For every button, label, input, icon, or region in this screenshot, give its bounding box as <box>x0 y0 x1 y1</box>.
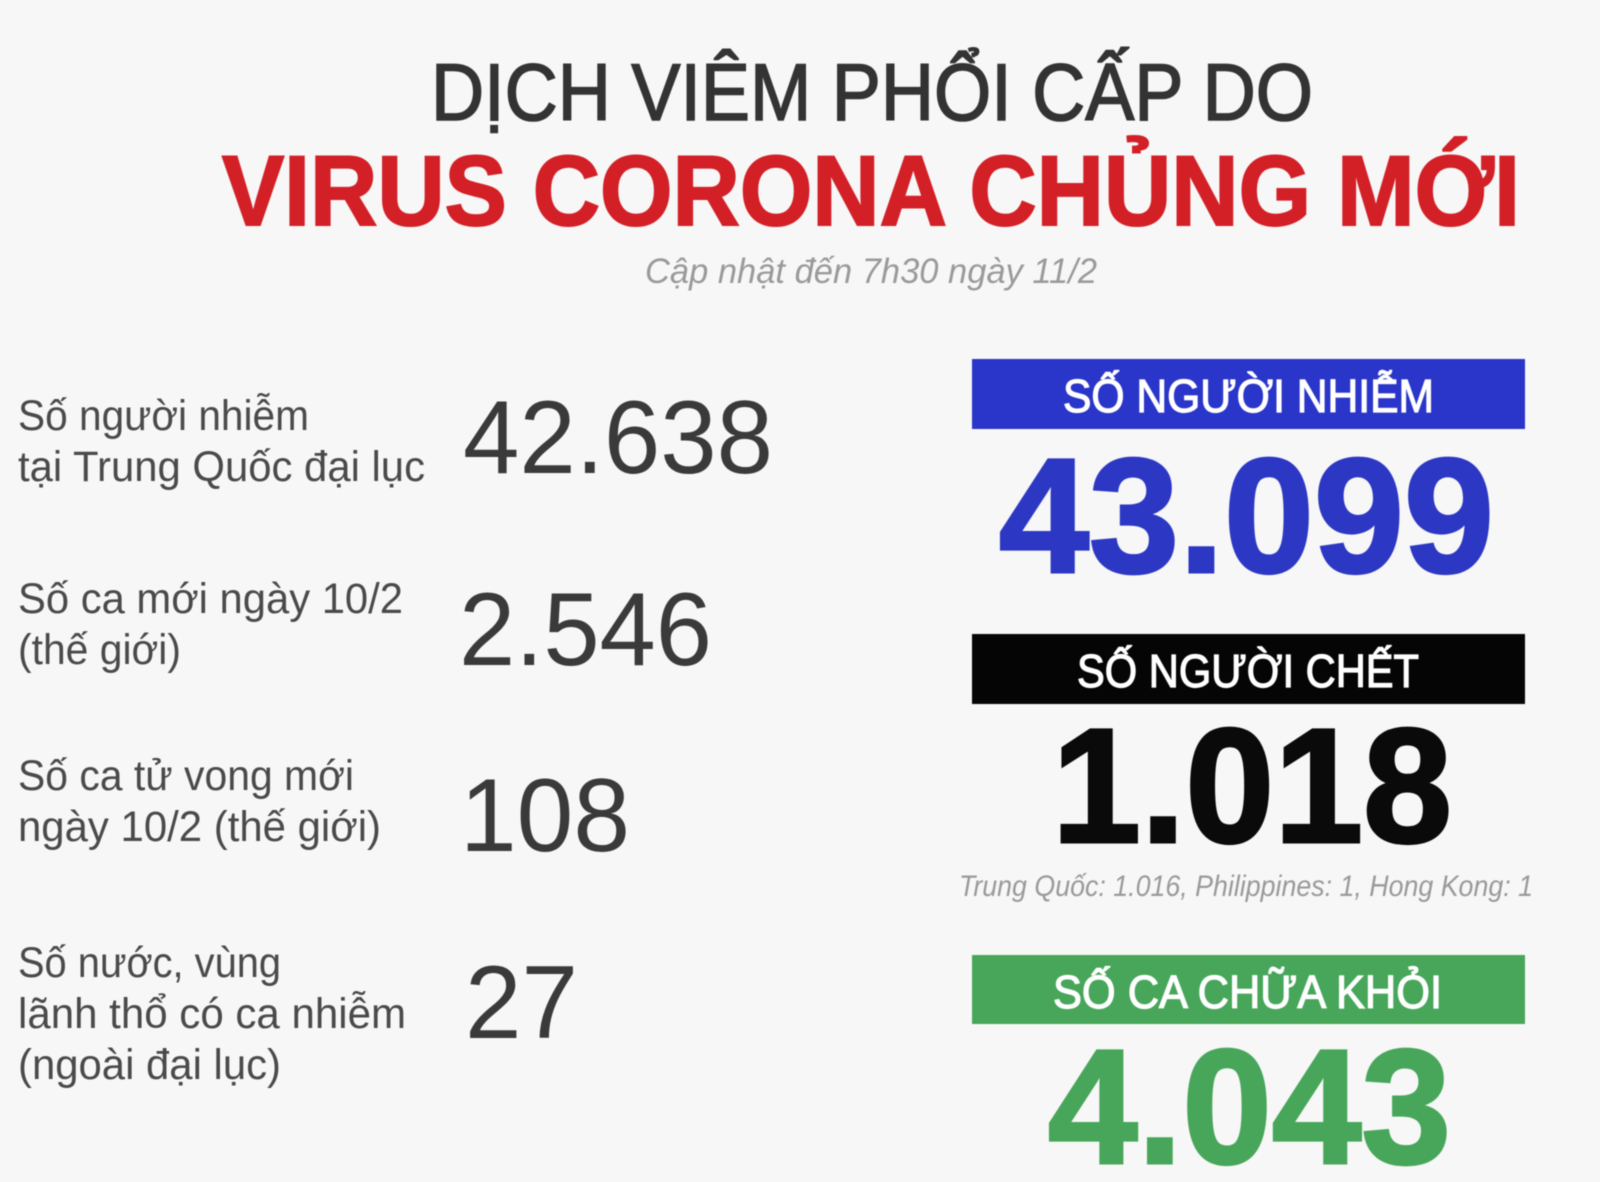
label: Số nước, vùng <box>18 939 281 987</box>
stat: new deaths 10/2 <box>18 752 630 874</box>
label line 3: (ngoài đại lục) <box>18 1041 281 1089</box>
title line 1: DỊCH VIÊM PHỔI CẤP DO <box>431 47 1313 138</box>
label line 2: lãnh thổ có ca nhiễm <box>18 990 406 1038</box>
label line 2: ngày 10/2 (thế giới) <box>18 803 381 851</box>
stat: new cases 10/2 <box>18 572 712 688</box>
big number: 43.099 <box>999 424 1494 607</box>
value: 2.546 <box>459 572 712 688</box>
update note: Cập nhật đến 7h30 ngày 11/2 <box>645 252 1097 291</box>
panel: infected total <box>972 359 1525 607</box>
header bar black <box>972 634 1525 704</box>
label: Số ca tử vong mới <box>18 752 354 800</box>
header bar blue <box>972 359 1525 429</box>
value: 108 <box>460 758 630 874</box>
value: 42.638 <box>463 380 773 496</box>
label: Số người nhiễm <box>18 392 309 440</box>
label: Số ca mới ngày 10/2 <box>18 575 403 623</box>
title line 2: VIRUS CORONA CHỦNG MỚI <box>222 135 1520 246</box>
value: 27 <box>465 945 578 1061</box>
big number: 1.018 <box>1052 694 1452 877</box>
title <box>222 47 1520 246</box>
panel: deaths total <box>959 634 1533 903</box>
panel: left statistics <box>18 380 773 1089</box>
deaths breakdown note: Trung Quốc: 1.016, Philippines: 1, Hong Kong: 1 <box>959 870 1533 903</box>
header text: SỐ NGƯỜI NHIỄM <box>1063 370 1434 422</box>
panel: recovered total <box>972 955 1525 1182</box>
label line 2: (thế giới) <box>18 626 181 674</box>
header text: SỐ CA CHỮA KHỎI <box>1053 966 1442 1018</box>
header bar green <box>972 955 1525 1024</box>
stat: infected in mainland China <box>18 380 773 496</box>
stat: countries and territories <box>18 939 578 1089</box>
header text: SỐ NGƯỜI CHẾT <box>1077 645 1419 697</box>
label line 2: tại Trung Quốc đại lục <box>18 443 425 491</box>
